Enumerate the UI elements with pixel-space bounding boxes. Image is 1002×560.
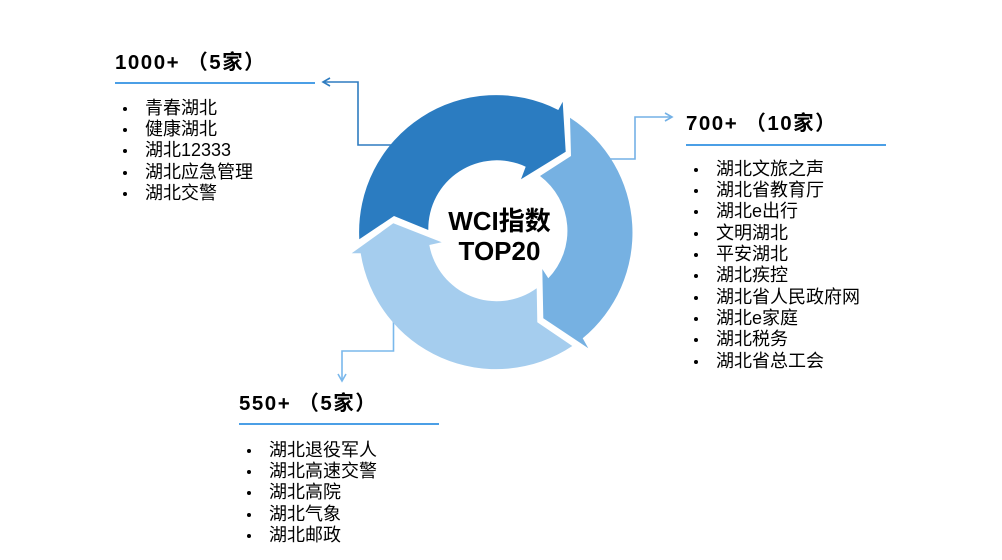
list: 700+ accounts: 湖北e出行 xyxy=(716,201,798,221)
list: 1000+ accounts: 青春湖北 xyxy=(145,98,217,118)
heading: 550+: 550+ （5家） xyxy=(239,392,377,414)
connector arrow: 700+ xyxy=(598,113,672,159)
list: 700+ accounts: 湖北省人民政府网 xyxy=(716,287,860,307)
list: 550+ accounts: 湖北高院 xyxy=(269,482,341,502)
panel: 700+ group xyxy=(686,112,886,371)
ring segment: medium blue arrow xyxy=(540,118,632,348)
list: 700+ accounts: 湖北疾控 xyxy=(716,265,788,285)
list: 550+ accounts: 湖北高速交警 xyxy=(269,461,377,481)
list: 550+ accounts: 湖北气象 xyxy=(269,504,341,524)
ring segment: dark blue arrow xyxy=(359,95,566,239)
list: 1000+ accounts: 健康湖北 xyxy=(145,119,217,139)
connector arrow: 1000+ xyxy=(323,78,392,145)
list: 700+ accounts: 平安湖北 xyxy=(716,244,788,264)
list: 550+ accounts xyxy=(247,440,377,545)
list: 550+ accounts: 湖北退役军人 xyxy=(269,440,377,460)
heading: 1000+: 1000+ （5家） xyxy=(115,50,266,74)
divider xyxy=(115,82,315,84)
list: 700+ accounts: 湖北e家庭 xyxy=(716,308,798,328)
panel: 550+ group xyxy=(239,392,439,545)
list: 1000+ accounts: 湖北应急管理 xyxy=(145,162,253,182)
list: 1000+ accounts: 湖北交警 xyxy=(145,183,217,203)
list: 700+ accounts: 湖北省教育厅 xyxy=(716,180,824,200)
list: 550+ accounts: 湖北邮政 xyxy=(269,525,341,545)
ring segment: light blue arrow xyxy=(352,223,572,369)
list: 700+ accounts: 文明湖北 xyxy=(716,223,788,243)
divider xyxy=(239,423,439,425)
list: 1000+ accounts xyxy=(123,98,253,203)
divider xyxy=(686,144,886,146)
connector arrow: 550+ xyxy=(338,320,394,381)
panel: 1000+ group xyxy=(115,50,315,203)
list: 700+ accounts xyxy=(694,158,860,371)
list: 700+ accounts: 湖北税务 xyxy=(716,329,788,349)
center label line 2: TOP20 xyxy=(459,236,540,266)
heading: 700+: 700+ （10家） xyxy=(686,112,837,134)
list: 700+ accounts: 湖北文旅之声 xyxy=(716,158,824,178)
list: 700+ accounts: 湖北省总工会 xyxy=(716,351,824,371)
list: 1000+ accounts: 湖北12333 xyxy=(145,140,231,160)
center label: WCI指数 xyxy=(448,206,551,236)
